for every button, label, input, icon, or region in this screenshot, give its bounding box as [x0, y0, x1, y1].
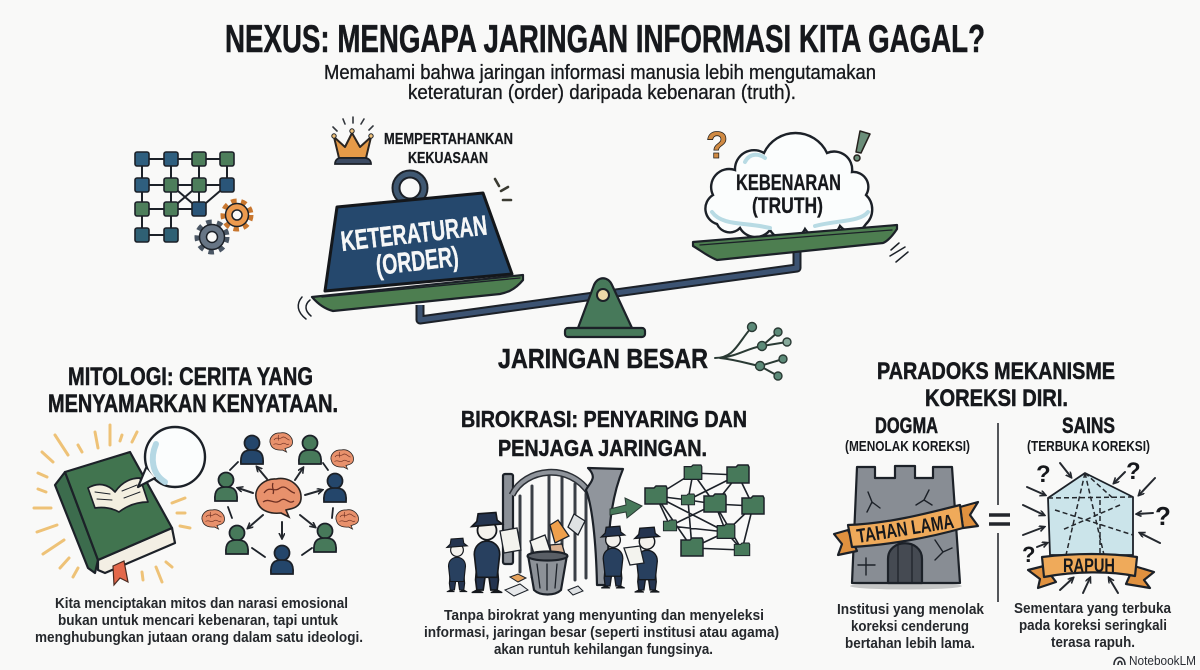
label: mempertahankan kekuasaan: KEKUASAAN	[408, 150, 488, 167]
subtitle: Memahami bahwa jaringan informasi manusia lebih mengutamakan	[324, 62, 876, 84]
text: sains: pada koreksi seringkali	[1019, 618, 1167, 634]
heading: birokrasi: BIROKRASI: PENYARING DAN	[461, 406, 747, 432]
panel: birokrasi	[424, 406, 779, 658]
text: dogma: bertahan lebih lama.	[845, 636, 975, 652]
cloud: kebenaran: KEBENARAN	[736, 170, 841, 195]
icon: trash bin with papers	[505, 514, 585, 596]
fulcrum	[565, 278, 645, 337]
heading: paradoks: KOREKSI DIRI.	[925, 385, 1068, 412]
heading: dogma: (MENOLAK KOREKSI)	[845, 438, 970, 455]
heading: sains	[1027, 413, 1150, 455]
motion marks	[298, 297, 311, 319]
banner: rapuh	[1028, 554, 1154, 588]
text: mitologi: Kita menciptakan mitos dan narasi emosional	[55, 596, 348, 612]
text: sains: Sementara yang terbuka	[1014, 601, 1172, 617]
icon: officials	[447, 513, 659, 593]
text: birokrasi: informasi, jaringan besar (seperti institusi atau agama)	[424, 625, 779, 641]
logo: notebooklm: NotebookLM	[1129, 654, 1196, 668]
icon: stone tower	[850, 466, 962, 590]
text: mitologi: menghubungkan jutaan orang dalam satu ideologi.	[35, 630, 363, 646]
heading: mitologi: MITOLOGI: CERITA YANG	[68, 363, 313, 391]
label: mempertahankan kekuasaan: MEMPERTAHANKAN	[384, 131, 513, 148]
cloud: kebenaran: (TRUTH)	[752, 193, 823, 218]
icon: glass crystal with arrows: ?	[1036, 461, 1051, 488]
text: sains: terasa rapuh.	[1051, 635, 1135, 651]
weight: keteraturan: KETERATURAN	[339, 210, 489, 257]
subtitle: keteraturan (order) daripada kebenaran (truth).	[408, 82, 796, 104]
heading: paradoks: PARADOKS MEKANISME	[877, 358, 1115, 385]
equals sign	[989, 515, 1010, 524]
icon: folder network	[645, 465, 764, 556]
banner: rapuh: RAPUH	[1063, 556, 1115, 577]
icon: glass crystal with arrows	[1022, 458, 1171, 593]
weight: keteraturan: (ORDER)	[374, 241, 460, 281]
subtitle	[324, 62, 876, 104]
label: mempertahankan kekuasaan	[384, 131, 513, 167]
banner: tahan lama	[834, 502, 978, 555]
balance scale	[298, 125, 908, 337]
label: jaringan besar: JARINGAN BESAR	[498, 343, 708, 374]
text: birokrasi: Tanpa birokrat yang menyunting dan menyeleksi	[444, 608, 764, 624]
left pan	[312, 275, 523, 311]
icon: branching tree	[715, 322, 791, 380]
icon: network grid with gears	[135, 152, 251, 252]
question mark: ?	[706, 125, 728, 167]
icon: crown	[332, 117, 373, 164]
beam	[420, 252, 797, 320]
diagram: brain connected to people	[202, 433, 359, 574]
panel: mitologi	[34, 363, 363, 646]
heading: dogma	[845, 413, 970, 455]
text: mitologi	[35, 596, 363, 646]
panel: paradoks	[834, 358, 1172, 652]
heading: paradoks	[877, 358, 1115, 412]
text: dogma: koreksi cenderung	[851, 619, 969, 635]
heading: birokrasi: PENJAGA JARINGAN.	[498, 435, 707, 461]
right pan	[693, 225, 897, 260]
exclamation mark	[856, 131, 870, 153]
heading: mitologi	[48, 363, 338, 418]
heading: sains: SAINS	[1062, 413, 1115, 438]
text: birokrasi	[424, 608, 779, 658]
text: mitologi: bukan untuk mencari kebenaran, tapi untuk	[58, 613, 339, 629]
text: dogma: Institusi yang menolak	[837, 602, 985, 618]
heading: sains: (TERBUKA KOREKSI)	[1027, 438, 1150, 455]
icon: glass crystal with arrows: ?	[1126, 458, 1141, 485]
arrow: gate to network	[610, 498, 642, 518]
banner: tahan lama: TAHAN LAMA	[855, 511, 956, 548]
cloud: kebenaran	[705, 133, 872, 240]
icon: glowing book with bubble	[34, 425, 205, 585]
heading: dogma: DOGMA	[875, 413, 938, 438]
icon: iron gate	[503, 468, 623, 585]
text: dogma	[837, 602, 985, 652]
text: sains	[1014, 601, 1172, 651]
icon: glass crystal with arrows: ?	[1155, 501, 1171, 531]
heading: birokrasi	[461, 406, 747, 461]
text: birokrasi: akan runtuh kehilangan fungsinya.	[494, 642, 713, 658]
heading: mitologi: MENYAMARKAN KENYATAAN.	[48, 390, 338, 418]
weight: keteraturan	[325, 174, 512, 291]
icon: glass crystal with arrows: ?	[1022, 542, 1035, 567]
